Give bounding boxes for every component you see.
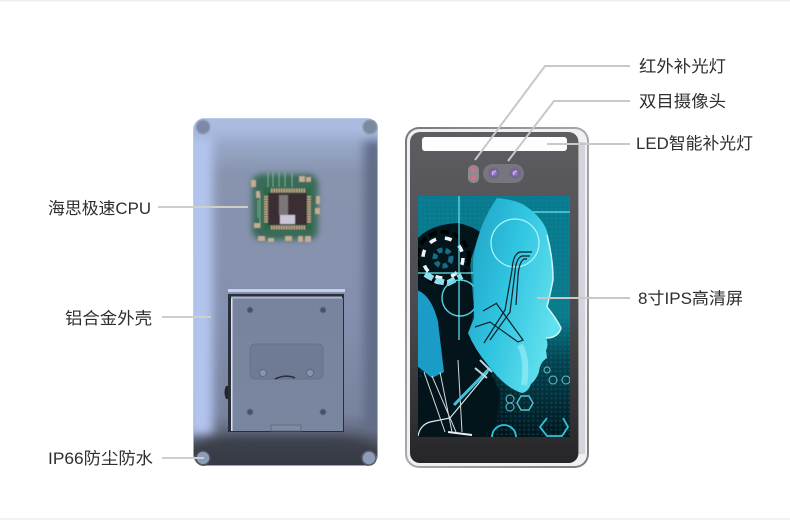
leader line: infrared fill light (475, 66, 630, 160)
LED fill light bar (422, 137, 567, 151)
label: 8寸IPS高清屏: 8寸IPS高清屏 (638, 289, 743, 308)
CPU chip on circuit board (251, 172, 320, 242)
label: 铝合金外壳: 铝合金外壳 (65, 309, 152, 328)
device back: aluminium shell (193, 118, 378, 466)
label: 海思极速CPU: 海思极速CPU (48, 199, 151, 218)
leader line: IP66 (162, 457, 204, 459)
dual camera (483, 164, 524, 183)
label: LED智能补光灯: LED智能补光灯 (636, 134, 753, 153)
plate recess (250, 344, 323, 379)
crosshair lines (418, 196, 570, 340)
device front (405, 127, 589, 468)
leader line: LED fill light (547, 143, 630, 145)
leader line: dual camera (508, 101, 630, 161)
screw feet (196, 120, 377, 465)
plate screws (247, 307, 326, 415)
screen artwork (417, 196, 570, 437)
infrared light (468, 165, 479, 183)
label: 红外补光灯: 红外补光灯 (639, 57, 726, 76)
left cyan panel (417, 290, 444, 378)
head circuitry (491, 219, 539, 267)
label: IP66防尘防水: IP66防尘防水 (48, 449, 154, 468)
head (468, 198, 561, 393)
robot gears (417, 232, 492, 436)
dark front face (410, 132, 578, 463)
label: 双目摄像头: 双目摄像头 (639, 92, 726, 111)
mounting plate (224, 289, 345, 432)
leader line: CPU (158, 206, 248, 208)
leader line: 8 inch screen (537, 297, 630, 299)
hexagons (506, 367, 570, 411)
robot left dark (418, 223, 500, 437)
leader line: shell (162, 316, 211, 318)
metal frame (405, 127, 589, 468)
